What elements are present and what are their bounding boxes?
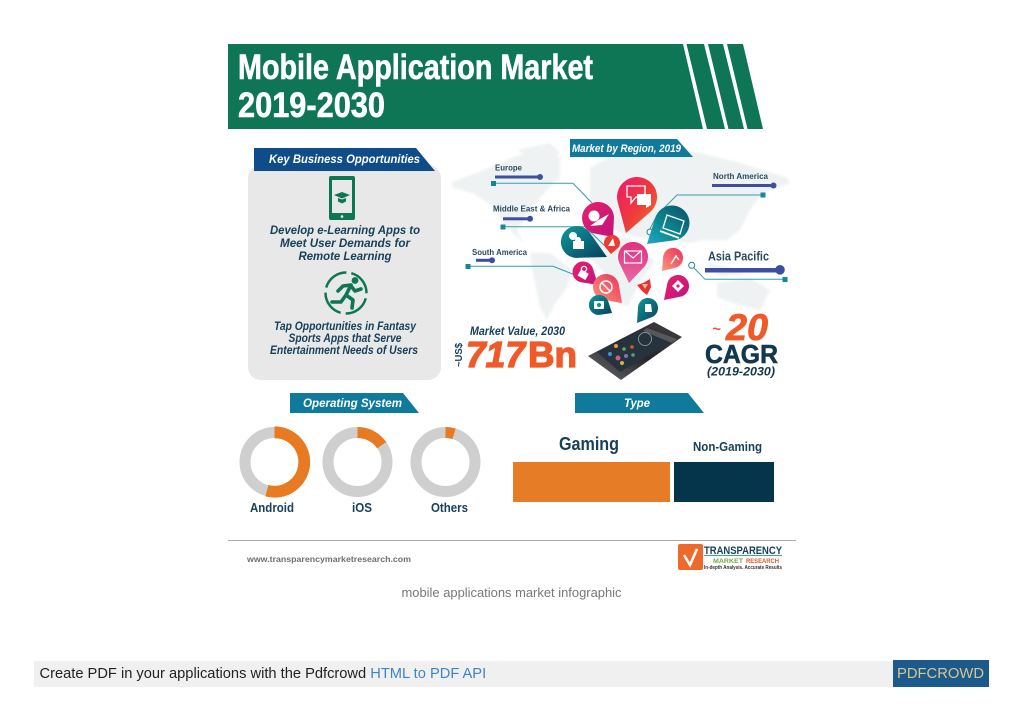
bubble: heart (637, 279, 651, 295)
heading: type (575, 393, 704, 413)
title banner (228, 44, 763, 129)
heading: operating system: Operating System (303, 396, 402, 410)
label: iOS: iOS (352, 500, 372, 515)
icon: running figure (321, 268, 371, 318)
text: fantasy sports opportunity (270, 321, 418, 357)
text: e-learning opportunity: Develop e-Learning Apps to (270, 223, 420, 237)
connector endpoints (466, 181, 788, 282)
bubble: chat (617, 177, 657, 233)
CAGR label: CAGR (705, 339, 778, 369)
PDFCROWD badge (893, 660, 989, 687)
CAGR value: ~ (712, 321, 721, 338)
bubble: camera (589, 295, 612, 315)
CAGR period: (2019-2030) (707, 366, 775, 378)
heading: operating system (290, 393, 419, 413)
logo: Transparency Market Research (678, 544, 783, 571)
market value number: 717 (466, 334, 527, 375)
bar: Gaming share (513, 462, 670, 502)
footer text: Create PDF in your applications with the Pdfcrowd HTML to PDF API (40, 666, 486, 682)
bubble: stop (593, 274, 622, 303)
label: Europe (495, 163, 543, 180)
bubble: music (662, 248, 683, 271)
donut chart: iOS (328, 432, 387, 492)
label: Asia Pacific (705, 250, 785, 275)
bar: Non-Gaming share (674, 462, 774, 502)
CAGR value: 20 (725, 307, 768, 348)
label: Gaming: Gaming (559, 434, 619, 454)
panel: key business opportunities (248, 148, 441, 380)
panel heading: market by region: Market by Region, 2019 (572, 143, 682, 155)
app bubbles cluster (561, 177, 689, 323)
connector lines (468, 183, 785, 279)
label: Asia Pacific: Asia Pacific (708, 250, 769, 264)
market value label: Market Value, 2030 (470, 326, 566, 338)
label: Europe: Europe (495, 163, 522, 173)
footer rule (228, 540, 796, 541)
bubble: lock (573, 261, 598, 285)
icon: tablet with graduation cap (329, 176, 355, 220)
logo: Transparency Market Research: MARKET (713, 558, 743, 565)
text: e-learning opportunity: Meet User Demands for (280, 236, 411, 250)
label: Middle East & Africa (493, 204, 570, 222)
bubble: teal (637, 298, 658, 323)
footer bar (34, 660, 989, 687)
logo: Transparency Market Research: TRANSPARENCY (704, 545, 783, 557)
heading: type: Type (624, 396, 650, 410)
currency label: ~US$ (453, 343, 465, 367)
text: e-learning opportunity: Remote Learning (298, 249, 392, 263)
label: Middle East & Africa: Middle East & Africa (493, 204, 570, 214)
panel heading: Key Business Opportunities (269, 152, 420, 166)
text: fantasy sports opportunity: Sports Apps that Serve (288, 333, 402, 345)
website URL: www.transparencymarketresearch.com (246, 554, 411, 564)
label: Non-Gaming: Non-Gaming (693, 439, 762, 454)
label: North America (712, 171, 776, 188)
bubble: video camera (561, 226, 607, 258)
donut chart: Others (416, 432, 475, 492)
smartphone (588, 322, 682, 380)
label: Others: Others (431, 500, 468, 515)
world map background (452, 143, 790, 320)
panel heading (254, 148, 435, 171)
label: Android: Android (250, 500, 294, 515)
title years: 2019-2030 (238, 86, 385, 125)
label: South America (472, 247, 527, 263)
PDFCROWD badge: PDFCROWD (897, 666, 984, 682)
donut chart: Android (245, 432, 304, 492)
text: fantasy sports opportunity: Tap Opportunities in Fantasy (274, 321, 417, 333)
market value number: Bn (528, 334, 577, 375)
bubble: mail (618, 242, 648, 283)
market value number (466, 334, 577, 375)
text: fantasy sports opportunity: Entertainment Needs of Users (270, 345, 418, 357)
text: e-learning opportunity (270, 223, 420, 263)
logo: Transparency Market Research: RESEARCH (746, 558, 779, 565)
panel heading: market by region (570, 139, 693, 157)
logo: Transparency Market Research: In-depth Analysis. Accurate Results (704, 565, 782, 571)
bubble: small red (604, 235, 620, 254)
label: South America: South America (472, 247, 527, 257)
bubble: Europe (582, 202, 614, 237)
label: North America: North America (713, 171, 768, 181)
bubble: laptop (647, 205, 689, 244)
title text: Mobile Application Market (238, 48, 593, 87)
caption: mobile applications market infographic (402, 585, 622, 600)
bubble: tag (664, 275, 689, 300)
